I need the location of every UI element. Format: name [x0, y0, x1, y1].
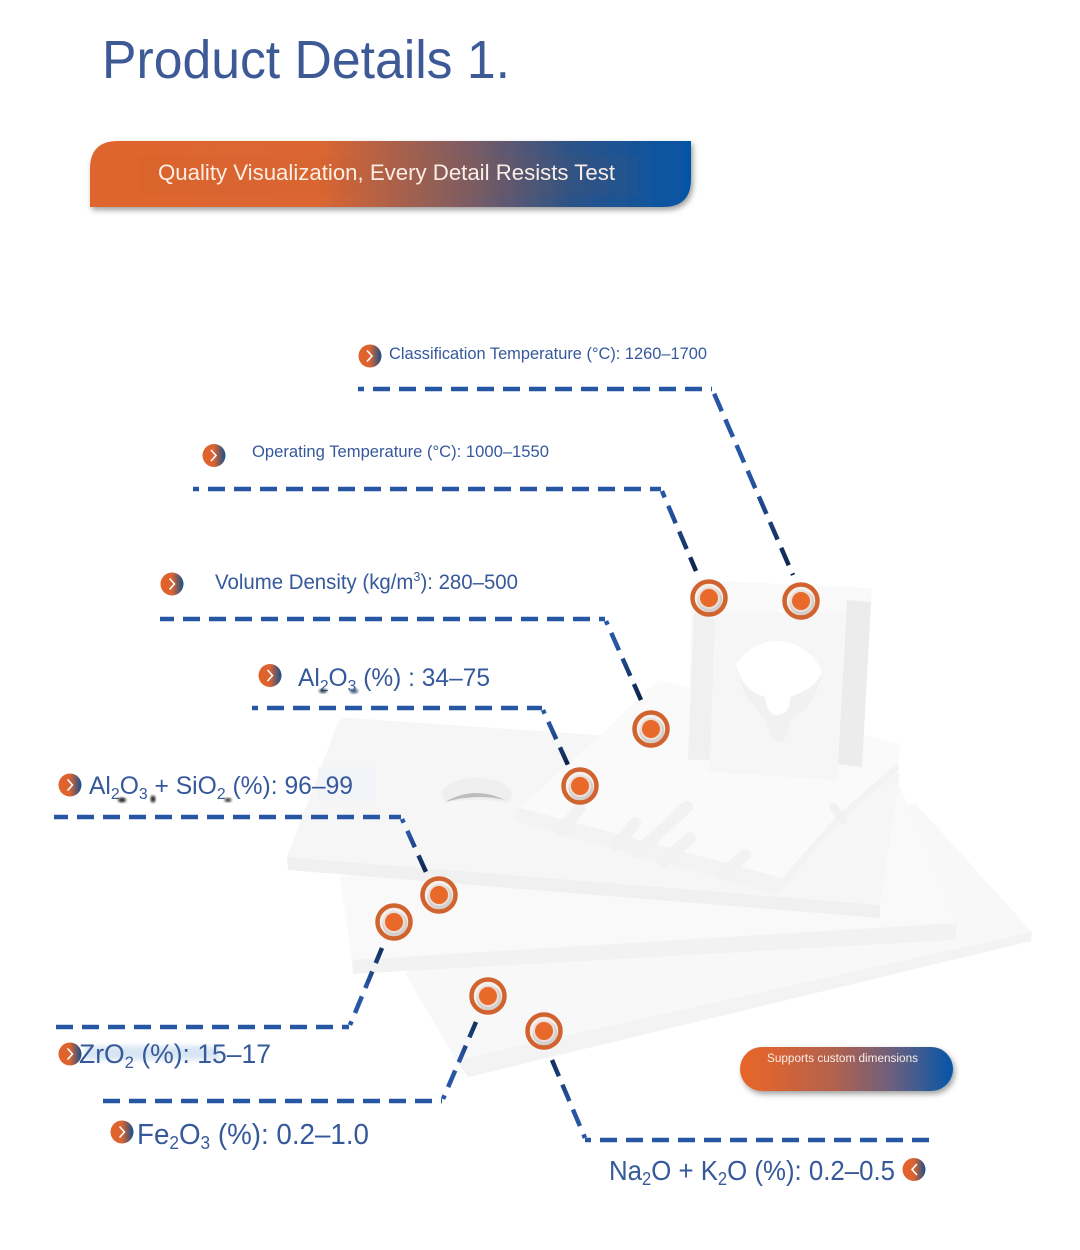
label: Al2O3: Al — [298, 664, 320, 692]
slot ribs — [562, 807, 745, 875]
leader diagonal: Na2O + K2O — [552, 1060, 585, 1138]
label: Fe2O3: O — [179, 1119, 201, 1151]
label: Al2O3: (%) : 34–75 — [356, 664, 490, 692]
label: Al2O3 + SiO2: 2 — [111, 786, 120, 803]
label: Al2O3: O — [329, 664, 348, 692]
label: volume density: ): 280–500 — [420, 571, 518, 594]
banner: quality visualization — [90, 141, 691, 207]
notched top layer — [513, 680, 900, 895]
label: Fe2O3: 2 — [169, 1133, 179, 1153]
label: Al2O3 + SiO2: (%): 96–99 — [226, 772, 353, 800]
label: Al2O3 + SiO2 — [58, 772, 353, 803]
banner: quality visualization: Quality Visualization, Every Detail Resists Test — [158, 160, 615, 185]
label: Al2O3 + SiO2: 3 — [139, 786, 148, 803]
title: Product Details 1. — [102, 30, 510, 90]
marker: Al2O3 + SiO2 — [422, 878, 456, 912]
marker: volume density — [634, 712, 668, 746]
leader diagonal: ZrO2 — [350, 948, 382, 1025]
label: Fe2O3: 3 — [201, 1133, 210, 1153]
marker: Na2O + K2O — [528, 1014, 560, 1048]
marker: ZrO2 — [378, 906, 410, 938]
marker: classification temperature — [784, 584, 818, 618]
label: volume density — [160, 569, 518, 596]
label: Na2O + K2O: 2 — [718, 1169, 727, 1189]
board hole — [441, 778, 512, 812]
label: Al2O3: 3 — [348, 678, 356, 695]
standing hole block — [688, 580, 872, 780]
label: Al2O3 + SiO2: Al — [89, 772, 111, 800]
leader: operating temperature — [193, 487, 661, 491]
label: ZrO2: (%): 15–17 — [134, 1039, 271, 1069]
label: ZrO2 — [58, 1039, 271, 1072]
leader diagonal: classification temperature — [713, 391, 793, 575]
leader: Na2O + K2O — [585, 1138, 929, 1142]
label: Na2O + K2O: 2 — [642, 1169, 651, 1189]
leader: ZrO2 — [56, 1025, 349, 1029]
label: operating temperature — [202, 443, 549, 467]
leader diagonal: Al2O3 + SiO2 — [402, 819, 426, 872]
label: Fe2O3: (%): 0.2–1.0 — [210, 1119, 369, 1151]
marker: Al2O3 — [564, 770, 596, 802]
faint patch behind Al2O3 + SiO2 label — [318, 767, 376, 801]
label: Al2O3: 2 — [320, 678, 329, 695]
label: Fe2O3 — [110, 1119, 369, 1153]
right column — [838, 600, 871, 767]
label: Al2O3 — [258, 664, 490, 695]
leader: Al2O3 + SiO2 — [54, 815, 401, 819]
label: classification temperature: Classification Temperature (°C): 1260–1700 — [389, 345, 707, 363]
label: Na2O + K2O: Na — [609, 1155, 645, 1186]
label: ZrO2: ZrO — [79, 1039, 125, 1069]
label: Na2O + K2O — [609, 1155, 926, 1189]
label: volume density: Volume Density (kg/m — [215, 571, 419, 594]
leader diagonal: Al2O3 — [543, 710, 568, 765]
leader diagonal: operating temperature — [662, 491, 696, 571]
product photo: stacked ceramic fibre boards — [287, 580, 1032, 1077]
pill: supports custom dimensions — [740, 1047, 953, 1091]
pill: supports custom dimensions: Supports custom dimensions — [767, 1053, 918, 1065]
top board — [287, 718, 900, 918]
middle board — [340, 780, 957, 974]
marker: operating temperature — [692, 582, 726, 614]
label: Al2O3 + SiO2: + SiO — [148, 772, 217, 800]
leader diagonal: Fe2O3 — [443, 1022, 476, 1099]
keyhole — [736, 641, 822, 715]
label: Al2O3 + SiO2: 2 — [217, 786, 226, 803]
left column — [688, 612, 715, 760]
label: Na2O + K2O: O + K — [651, 1155, 718, 1186]
marker: Fe2O3 — [472, 980, 504, 1012]
label: ZrO2: 2 — [125, 1053, 134, 1072]
keyhole recess — [737, 668, 822, 742]
label: Na2O + K2O: O (%): 0.2–0.5 — [727, 1155, 895, 1186]
leader: volume density — [160, 617, 605, 621]
label: operating temperature: Operating Temperature (°C): 1000–1550 — [252, 443, 549, 461]
label: Al2O3 + SiO2: O — [120, 772, 139, 800]
front face — [710, 612, 845, 780]
label: Fe2O3: Fe — [137, 1119, 171, 1151]
leader: classification temperature — [358, 387, 712, 391]
leader: Al2O3 — [252, 706, 542, 710]
leader: Fe2O3 — [103, 1099, 442, 1103]
leader diagonal: volume density — [606, 621, 641, 700]
label: volume density: 3 — [413, 569, 420, 584]
bottom board — [405, 803, 1032, 1077]
